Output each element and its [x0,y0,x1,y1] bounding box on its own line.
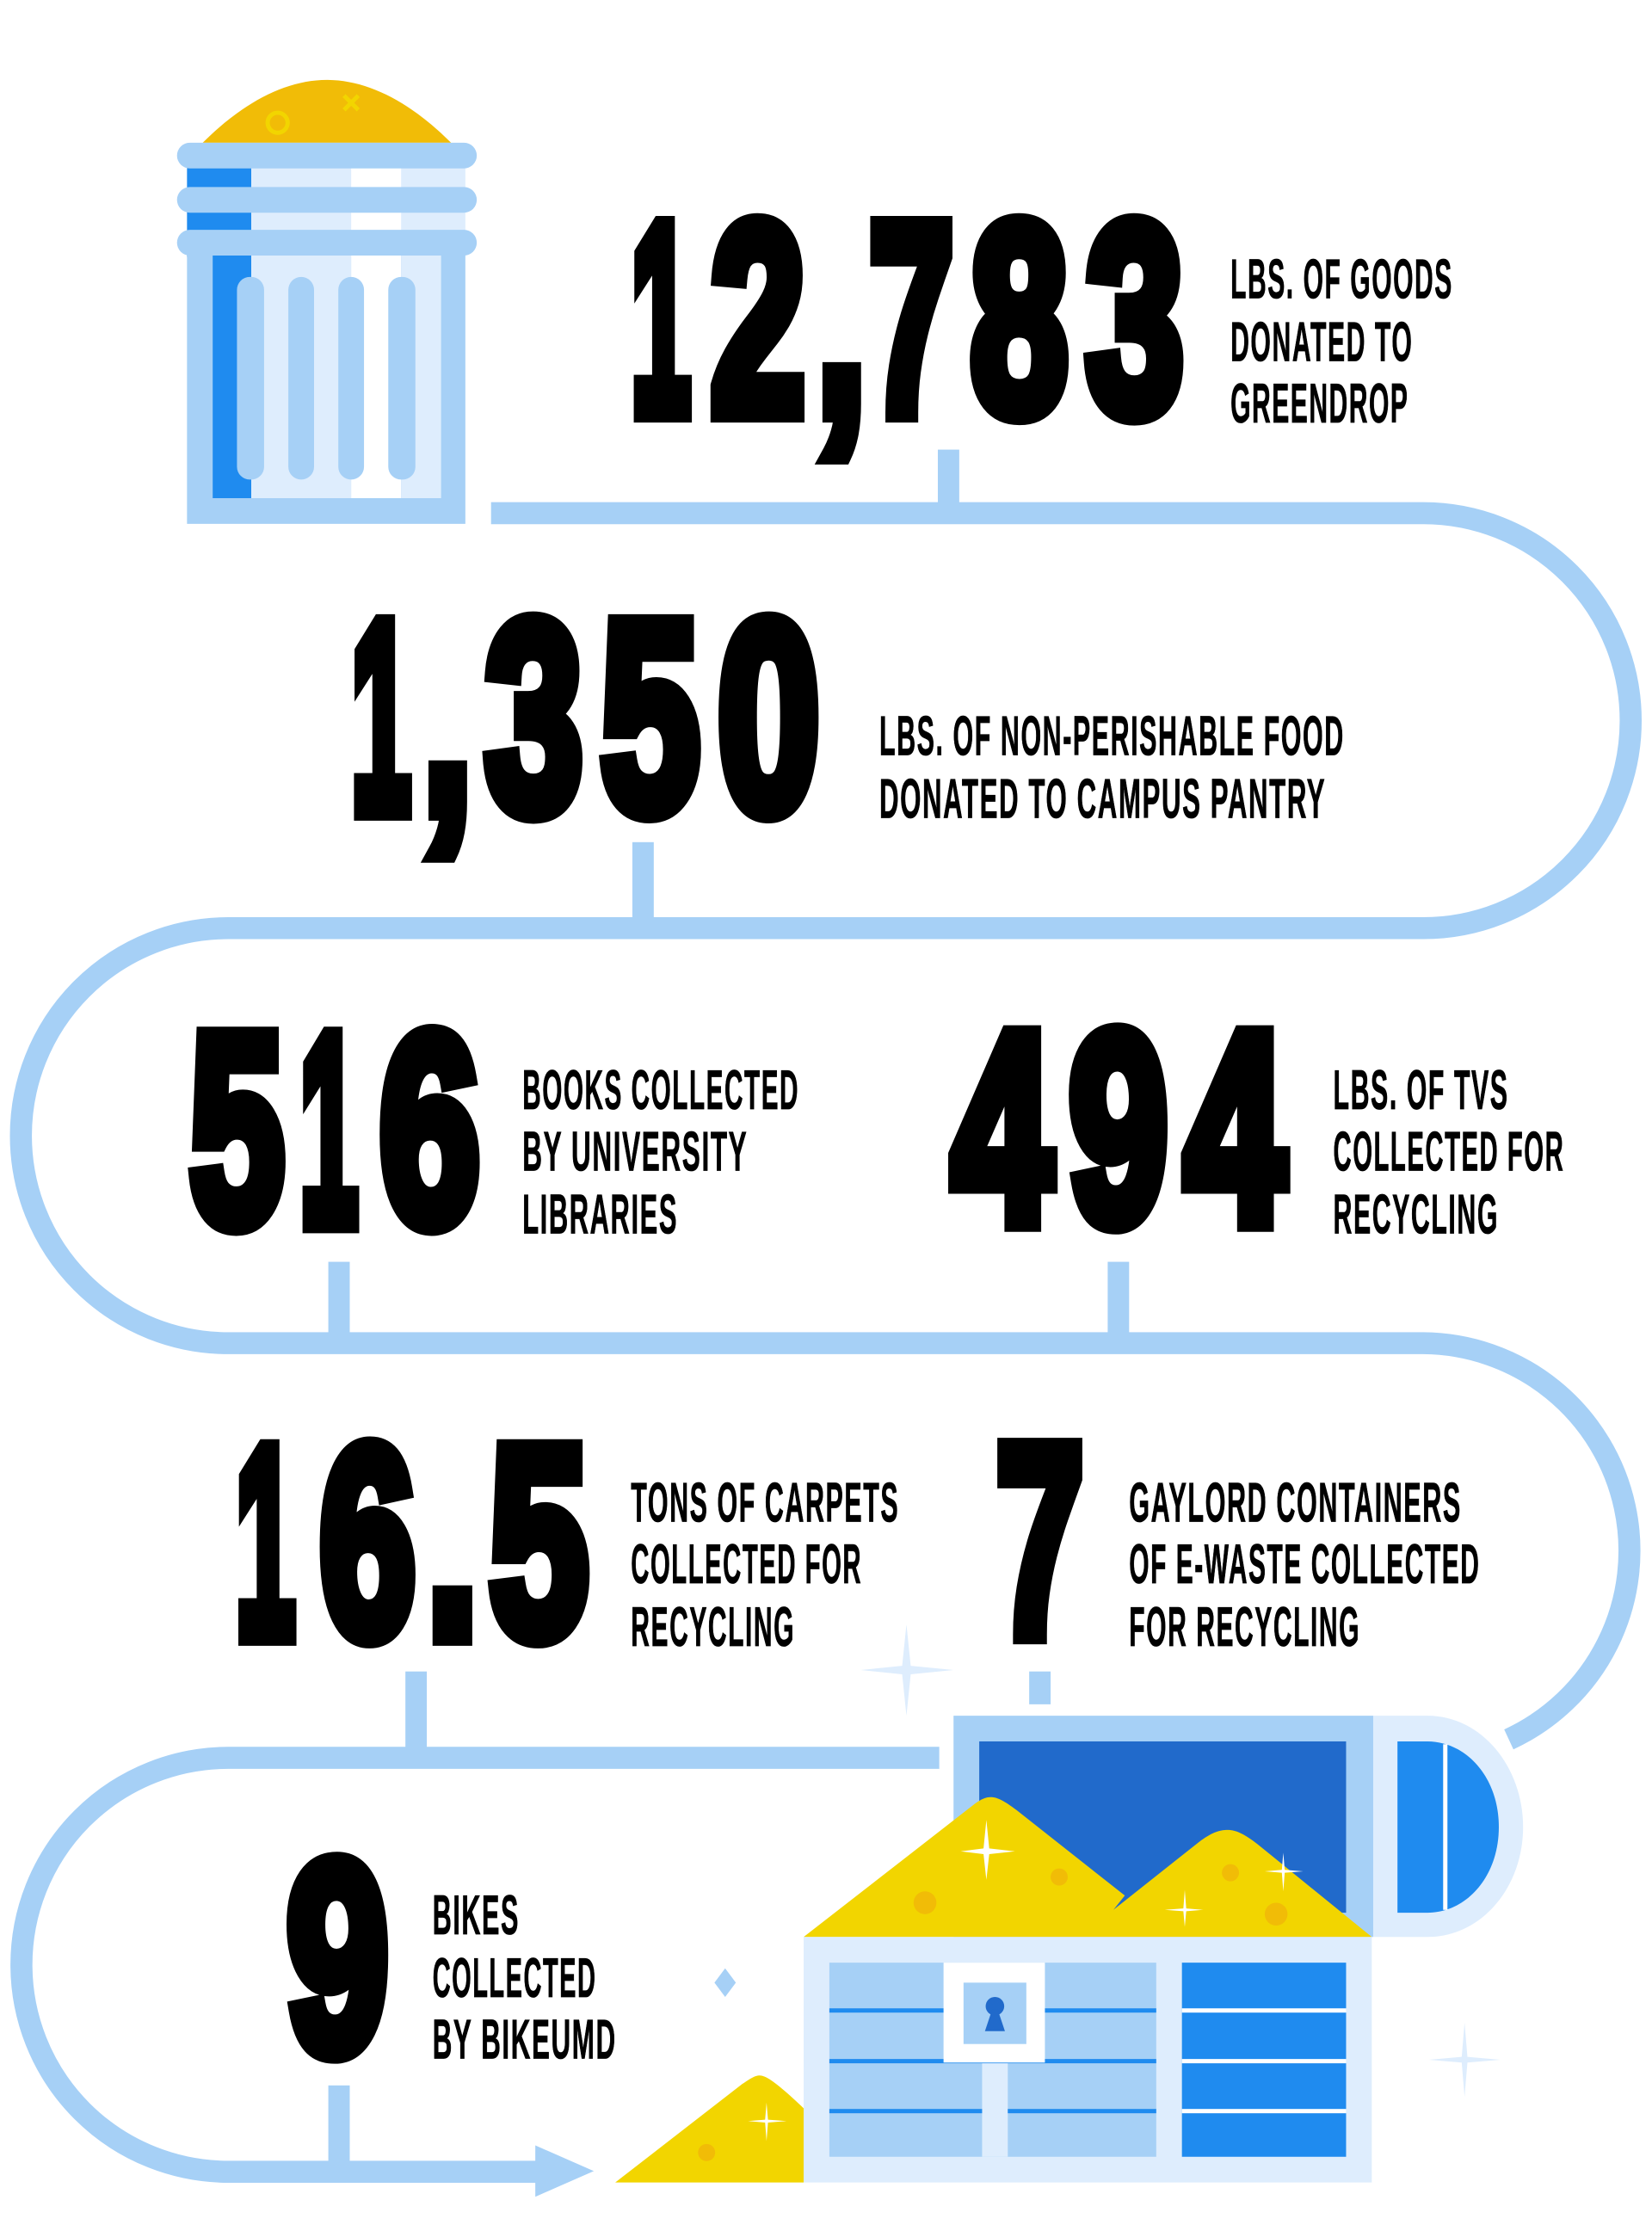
arrowhead at end of path [535,2145,594,2197]
text: BOOKS COLLECTED [522,1058,799,1121]
stat: 16.5 tons of carpets: 1 [236,1390,295,1693]
stat: 494 lbs of TVs [952,977,1564,1343]
stat: 9 bikes: 9 [287,1806,388,2109]
stat: 12,783 lbs of goods: , [817,167,866,470]
stat: 9 bikes [287,1806,617,2172]
stat: 1,350 lbs of food: 3 [485,565,583,868]
stat: 9 bikes: BIKES [433,1883,520,1946]
stat: 16.5 tons of carpets: . [427,1390,478,1693]
icon: treasure chest with gold [615,1716,1523,2183]
stat: 7 gaylord containers: 7 [996,1390,1083,1692]
icon: overflowing trash can [177,80,477,524]
stat: 1,350 lbs of food: 1 [351,565,411,868]
stat: 16.5 tons of carpets [236,1390,899,1757]
stat: 16.5 tons of carpets: COLLECTED FOR [631,1532,862,1595]
stat: 9 bikes: COLLECTED [433,1946,596,2009]
stat: 1,350 lbs of food [351,565,1345,927]
stat: 12,783 lbs of goods: 7 [869,167,953,470]
stat: 516 books: BY UNIVERSITY [522,1119,748,1182]
stat: 516 books: 5 [190,978,284,1281]
stat: 516 books [190,978,799,1343]
stat: 12,783 lbs of goods: 3 [1087,167,1183,470]
stat: 12,783 lbs of goods: 1 [631,167,691,470]
stat: 516 books: 6 [379,978,479,1281]
stat: 516 books: LIBRARIES [522,1182,678,1245]
stat: 12,783 lbs of goods: 2 [711,167,805,470]
stat: 12,783 lbs of goods: DONATED TO [1230,311,1413,373]
text: TONS OF CARPETS [631,1471,899,1534]
stat: 494 lbs of TVs: 9 [1069,977,1168,1279]
stat: 516 books: 1 [299,978,358,1281]
stat: 494 lbs of TVs: 4 [1185,977,1285,1279]
icon: sparkle above chest [860,1624,953,1716]
stat: 12,783 lbs of goods: 8 [971,167,1068,470]
stat: 494 lbs of TVs: 4 [952,977,1053,1279]
stat: 16.5 tons of carpets: 6 [320,1390,416,1693]
stat: 12,783 lbs of goods: GREENDROP [1230,372,1409,434]
stat: 7 gaylord containers: FOR RECYCLING [1129,1595,1360,1658]
stat: 12,783 lbs of goods [631,167,1453,513]
winding path line [21,513,1630,2172]
icon: small diamond [714,1969,736,1997]
stat: 1,350 lbs of food: , [422,565,472,868]
stat: 1,350 lbs of food: 0 [718,565,819,868]
text: BY BIKEUMD [433,2007,617,2070]
stat: 16.5 tons of carpets: 5 [490,1390,589,1693]
stat: 16.5 tons of carpets: RECYCLING [631,1595,795,1658]
stat: 7 gaylord containers [996,1390,1480,1704]
icon: sparkle right of chest [1429,2023,1501,2097]
stat: 1,350 lbs of food: 5 [601,565,700,868]
